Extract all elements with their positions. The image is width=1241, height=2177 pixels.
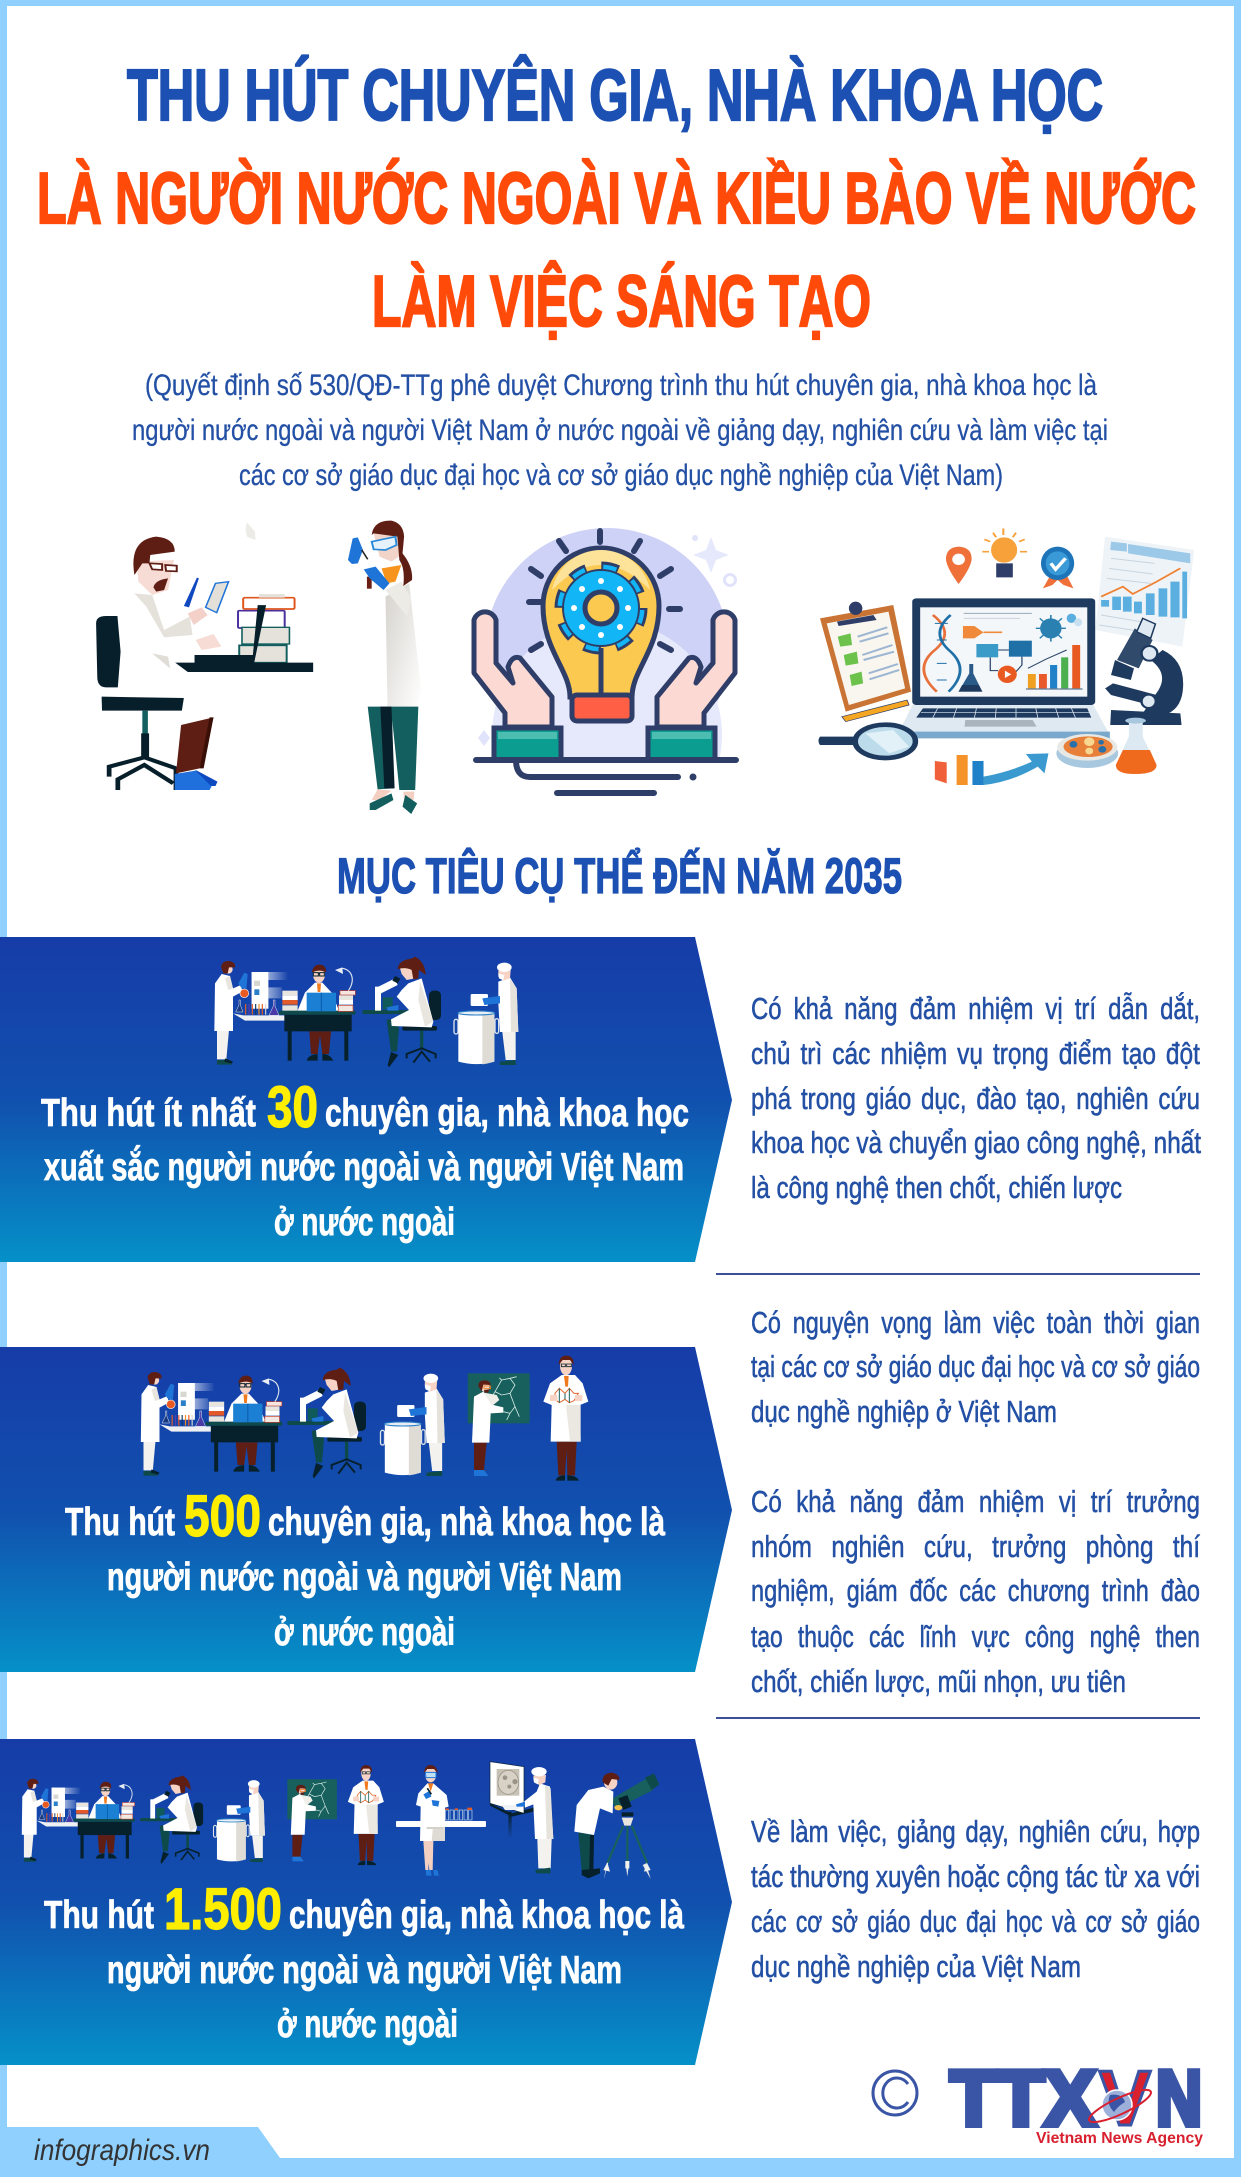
chart sheet: [1095, 537, 1194, 647]
text: panel 3 description: [751, 1814, 1200, 1984]
small bulb: [982, 528, 1027, 577]
banner text: người nước ngoài và người Việt Nam: [107, 1949, 622, 1992]
banner text: ở nước ngoài: [274, 1611, 455, 1654]
arrow banner: [0, 1347, 732, 1672]
banner text: xuất sắc người nước ngoài và người Việt Nam: [44, 1145, 684, 1189]
banner text: 30: [267, 1075, 318, 1140]
logo: TTXVN Vietnam News Agency: N: [1156, 2054, 1202, 2142]
text: panel 1 description: [751, 991, 1201, 1205]
title: LÀM VIỆC SÁNG TẠO: [372, 261, 871, 342]
microscope: [1105, 618, 1183, 725]
flask: [1116, 718, 1157, 774]
banner text: chuyên gia, nhà khoa học là: [289, 1894, 684, 1937]
banner text: chuyên gia, nhà khoa học là: [268, 1501, 665, 1544]
banner text: ở nước ngoài: [274, 1201, 455, 1244]
scientists illustration: [22, 1762, 659, 1879]
banner text: [41, 1075, 689, 1244]
clipboard: [820, 602, 911, 722]
banner text: 1.500: [164, 1877, 282, 1942]
banner text: ở nước ngoài: [277, 2003, 458, 2046]
subtitle: các cơ sở giáo dục đại học và cơ sở giáo dục nghề nghiệp của Việt Nam): [239, 459, 1003, 492]
panel: 1500 experts: [0, 1739, 732, 2065]
text: panel 1 description: là công nghệ then chốt, chiến lược: [751, 1170, 1122, 1205]
subtitle: [132, 369, 1108, 492]
icon: woman scientist: [348, 521, 421, 814]
icon: light bulb with gear held by hands: [472, 528, 739, 796]
logo: TTXVN Vietnam News Agency: [950, 2054, 1203, 2147]
banner text: 500: [184, 1484, 261, 1549]
logo: TTXVN Vietnam News Agency: Vietnam News Agency: [1036, 2130, 1203, 2147]
text: panel 2 description: [751, 1305, 1200, 1699]
arrow banner: [0, 1739, 732, 2065]
banner text: Thu hút: [44, 1894, 154, 1937]
section heading: MỤC TIÊU CỤ THỂ ĐẾN NĂM 2035: [337, 848, 902, 904]
footer tab: infographics.vn: [0, 2127, 280, 2177]
logo: TTXVN Vietnam News Agency: V: [1099, 2054, 1151, 2142]
bottom bars and arrow: [935, 753, 1048, 785]
arrow banner: [0, 937, 732, 1262]
footer tab: infographics.vn: infographics.vn: [34, 2134, 210, 2167]
icon: technician at monitor: [490, 1762, 553, 1873]
text: panel 3 description: dục nghề nghiệp của Việt Nam: [751, 1949, 1081, 1984]
icon: man with telescope: [574, 1773, 659, 1879]
copyright symbol: [873, 2071, 917, 2115]
panel: 30 experts: [0, 937, 732, 1262]
icon: man reading at desk: [96, 523, 313, 790]
panel: 500 experts: [0, 1347, 732, 1672]
map pin: [946, 547, 972, 584]
scientists illustration: [141, 1356, 588, 1481]
banner text: người nước ngoài và người Việt Nam: [107, 1556, 622, 1599]
banner text: [44, 1877, 684, 2046]
icon: woman at lab table: [396, 1765, 486, 1876]
title: [37, 55, 1196, 342]
logo: TTXVN Vietnam News Agency: TTX: [950, 2054, 1096, 2142]
banner text: Thu hút: [65, 1501, 175, 1544]
text: panel 2 description: chốt, chiến lược, mũi nhọn, ưu tiên: [751, 1664, 1126, 1699]
text: panel 2 description: dục nghề nghiệp ở Việt Nam: [751, 1394, 1057, 1429]
scientists illustration: [214, 957, 518, 1067]
banner text: Thu hút ít nhất: [41, 1092, 256, 1135]
badge: [1041, 547, 1074, 588]
petri dish: [1056, 734, 1118, 768]
icon: laptop with science objects: [818, 528, 1194, 785]
banner text: [65, 1484, 665, 1654]
magnifier: [818, 725, 915, 758]
banner text: chuyên gia, nhà khoa học: [325, 1092, 689, 1135]
laptop: [897, 598, 1110, 738]
